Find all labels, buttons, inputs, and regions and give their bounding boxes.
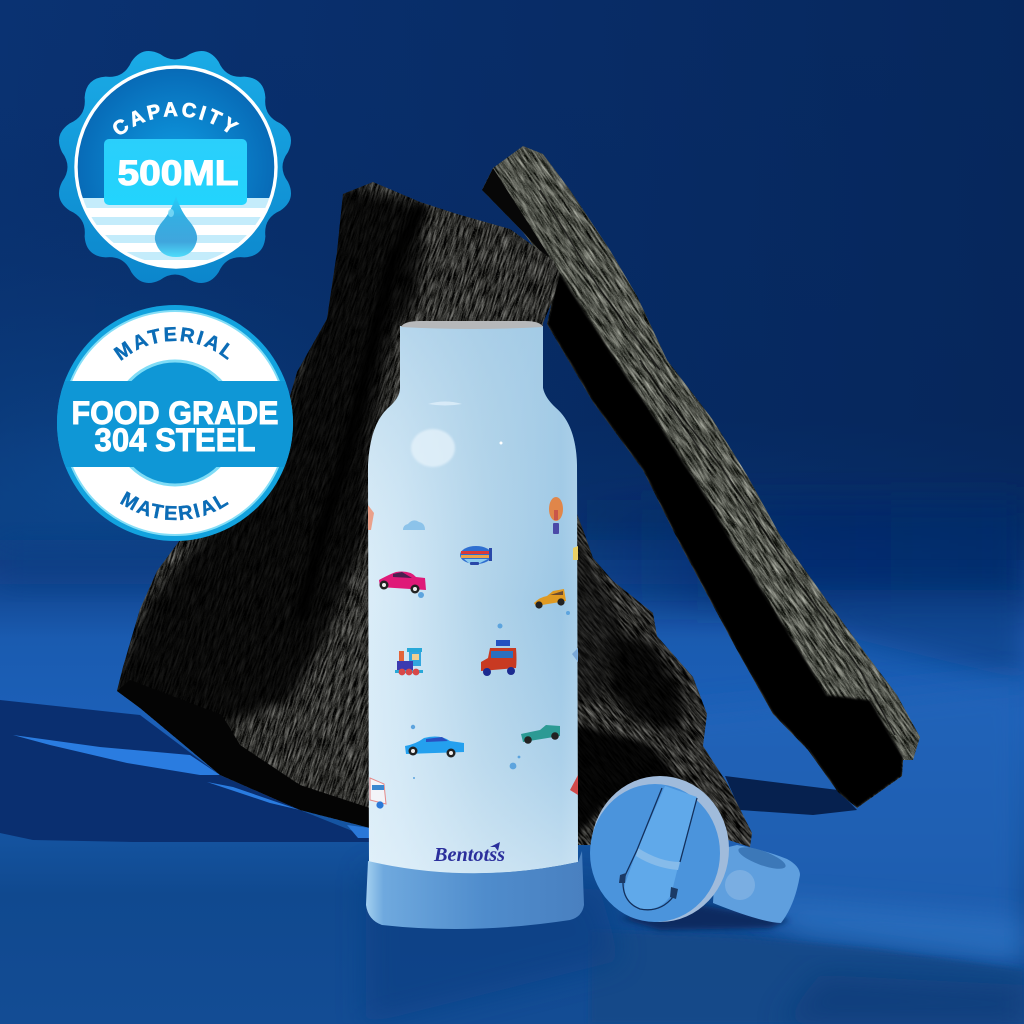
lid disc rim bbox=[591, 776, 729, 922]
bottle pattern: train bbox=[395, 648, 423, 675]
striped water area bbox=[82, 198, 270, 266]
bottle pattern: cloud bbox=[403, 520, 425, 530]
logo paper plane icon bbox=[490, 842, 500, 851]
charcoal log: right bbox=[482, 146, 920, 808]
lid shadow bbox=[620, 905, 790, 930]
lid disc bbox=[590, 784, 720, 922]
badge: material food grade 304 steel bbox=[57, 305, 293, 541]
charcoal rock: lower, behind bottle bbox=[577, 514, 752, 847]
background wall bbox=[0, 0, 1024, 600]
304 steel text: 304 STEEL bbox=[94, 422, 256, 458]
bottle pattern: edge fragments bbox=[368, 505, 578, 795]
bottle pattern: blimp bbox=[460, 546, 492, 565]
bottle pattern: green convertible bbox=[521, 725, 560, 744]
bottle pattern: red jeep bbox=[481, 640, 516, 676]
bottle pattern: dots bbox=[411, 592, 570, 779]
lid loop handle bbox=[713, 845, 800, 923]
material bottom label: MATERIAL bbox=[120, 491, 229, 520]
brand logo: Bentotss: Bentotss bbox=[433, 844, 505, 866]
drop highlight bbox=[168, 209, 174, 217]
bottle pattern: yellow car bbox=[534, 589, 566, 609]
bottle pattern: blue car bbox=[405, 737, 464, 758]
block dark face bbox=[110, 185, 425, 725]
bottle body bbox=[368, 326, 578, 874]
bottle pattern: hot-air balloon bbox=[549, 497, 563, 534]
latch outline bbox=[623, 788, 697, 910]
outer ring bbox=[57, 305, 293, 541]
white ring bbox=[76, 67, 276, 267]
loop button bbox=[725, 870, 755, 900]
center circle bbox=[113, 361, 237, 485]
inner disc bbox=[76, 67, 276, 267]
material top label: MATERIAL bbox=[113, 326, 230, 361]
latch collar bbox=[636, 848, 680, 870]
lid latch bbox=[625, 786, 697, 909]
charcoal block: left bbox=[110, 170, 570, 840]
loop opening bbox=[736, 843, 788, 873]
bottle mouth rim bbox=[401, 321, 543, 329]
bottle pattern: pink car bbox=[379, 572, 426, 594]
shoulder highlight bbox=[428, 402, 462, 406]
food grade text: FOOD GRADE bbox=[72, 395, 278, 431]
bottle pattern: bus bbox=[370, 778, 386, 809]
scalloped edge bbox=[59, 51, 291, 283]
bottle bbox=[366, 321, 584, 929]
value panel bbox=[104, 139, 247, 205]
value 500ml: 500ML bbox=[118, 154, 238, 193]
bottle highlight bbox=[411, 429, 455, 467]
log underside in shadow bbox=[547, 273, 903, 808]
capacity label: CAPACITY bbox=[113, 102, 240, 134]
badge: capacity 500ml bbox=[59, 51, 291, 283]
latch tabs bbox=[619, 873, 678, 899]
center band bbox=[57, 381, 293, 467]
floor with light and shadows bbox=[0, 500, 1024, 1024]
silicone base sleeve bbox=[366, 851, 584, 929]
white disc bbox=[63, 311, 287, 535]
lid with carry loop bbox=[590, 776, 800, 930]
water drop icon bbox=[155, 196, 197, 257]
